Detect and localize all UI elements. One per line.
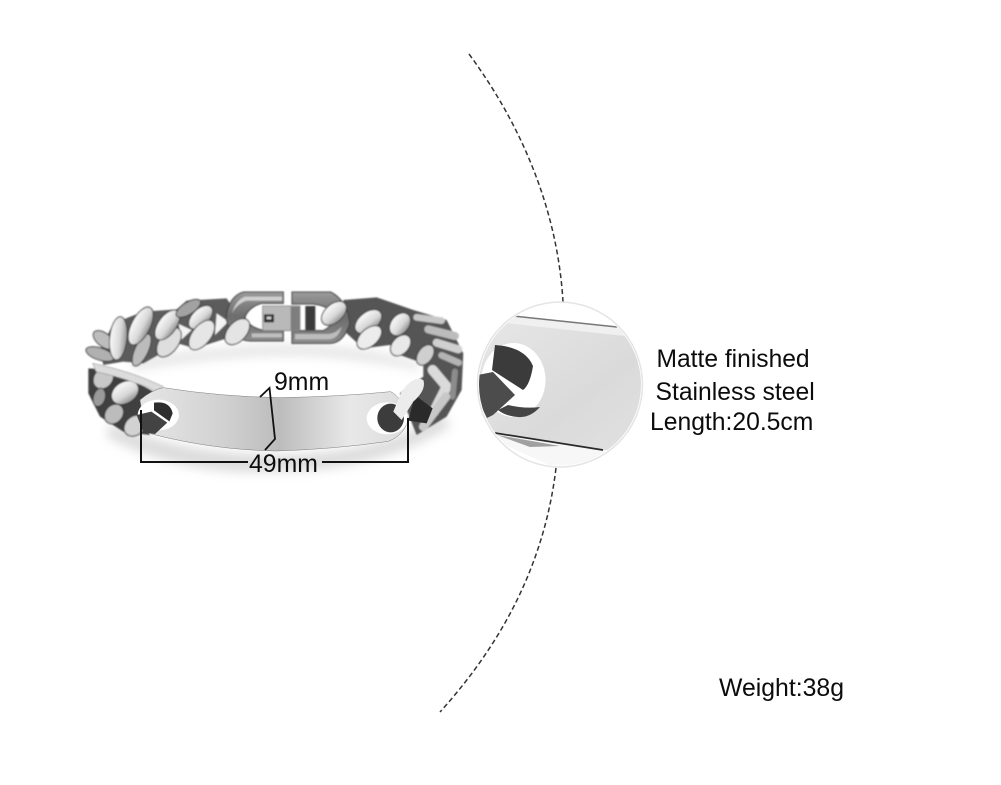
chain: upper left links [84,296,255,369]
magnified plate [480,323,641,450]
chain: dark backing, upper right [343,297,463,435]
nameplate [137,379,433,451]
hole: right [367,402,408,434]
chain: right chevrons [417,317,459,427]
dimension: 49mm bracket [141,410,408,462]
right link through hole [408,395,433,423]
spec: material and length: Matte finished [656,346,810,373]
chain: upper right links [317,297,438,368]
inner shadow behind far chain [133,345,420,370]
label: 49mm: 49mm [249,451,318,478]
product infographic [84,54,842,712]
dimension: 9mm bracket [260,388,275,450]
plate top band [505,316,625,336]
magnified detail lens [476,301,644,468]
spec: material and length: Stainless steel [656,379,815,406]
chain: white gaps, upper left [179,313,228,339]
dashed arc: upper [469,54,563,302]
clasp: centre latch [263,306,300,331]
spec: material and length: Length:20.5cm [650,409,813,436]
label: 9mm: 9mm [274,369,329,396]
hole: left [138,400,179,430]
clasp: right half [292,292,350,343]
bracelet shadow [107,413,450,472]
clasp: left half [226,292,283,341]
bracelet photo [84,292,463,472]
dashed arc: lower [440,468,556,712]
spec: material and length [650,346,815,436]
spec: weight: Weight:38g [719,675,844,702]
chain: dark backing, lower left [88,368,157,435]
magnified hole [482,343,546,417]
plate top strip [93,363,163,391]
chain: lower left links [89,364,150,441]
plate lower edge [495,433,650,470]
chain: dark backing, upper left [100,298,237,365]
